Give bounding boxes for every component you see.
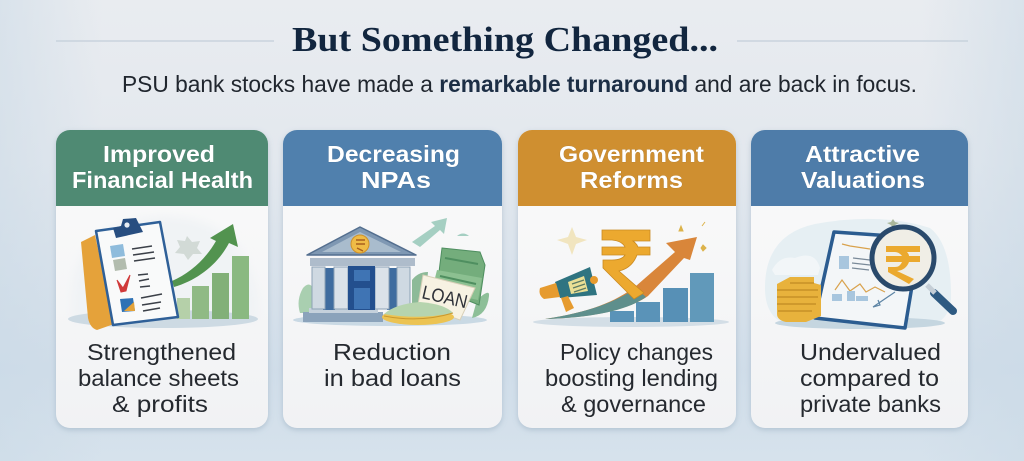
panel: improved financial health — [56, 130, 268, 428]
header: attractive valuations: Attractive — [805, 141, 920, 167]
description: improved financial health: Strengthened — [87, 339, 236, 365]
header: government reforms: Reforms — [580, 167, 683, 193]
description: attractive valuations — [800, 339, 941, 417]
header: improved financial health — [56, 130, 268, 206]
title: But Something Changed... — [292, 20, 718, 59]
description: improved financial health — [78, 339, 239, 417]
subtitle: PSU bank stocks have made a remarkable turnaround and are back in focus. — [122, 71, 917, 97]
description: decreasing NPAs: in bad loans — [324, 365, 461, 391]
header: attractive valuations — [751, 130, 968, 206]
header: attractive valuations: Valuations — [801, 167, 925, 193]
description: government reforms: & governance — [561, 391, 706, 417]
description: government reforms: boosting lending — [545, 365, 718, 391]
description: attractive valuations: Undervalued — [800, 339, 941, 365]
description: government reforms — [545, 339, 718, 417]
header: improved financial health: Improved — [103, 141, 215, 167]
description: decreasing NPAs — [324, 339, 461, 391]
panel: attractive valuations — [751, 130, 968, 428]
icon: clipboard with rising bars and arrow — [68, 216, 258, 330]
description: decreasing NPAs: Reduction — [333, 339, 451, 365]
header: improved financial health: Financial Health — [72, 167, 253, 193]
header: government reforms — [518, 130, 736, 206]
header: decreasing NPAs: Decreasing — [327, 141, 460, 167]
header: government reforms: Government — [559, 141, 704, 167]
panel: decreasing NPAs — [283, 130, 502, 428]
description: improved financial health: & profits — [112, 391, 208, 417]
description: attractive valuations: private banks — [800, 391, 941, 417]
icon: bank with loan and cash: LOAN — [420, 282, 469, 313]
description: attractive valuations: compared to — [800, 365, 939, 391]
header: decreasing NPAs: NPAs — [361, 167, 431, 193]
icon: megaphone, rupee and rising arrow — [533, 222, 729, 327]
description: government reforms: Policy changes — [560, 339, 713, 365]
icon: bank with loan and cash — [293, 218, 489, 326]
panel: government reforms — [518, 130, 736, 428]
description: improved financial health: balance sheets — [78, 365, 239, 391]
icon: tablet, coins and magnifier — [765, 219, 953, 329]
header: decreasing NPAs — [283, 130, 502, 206]
